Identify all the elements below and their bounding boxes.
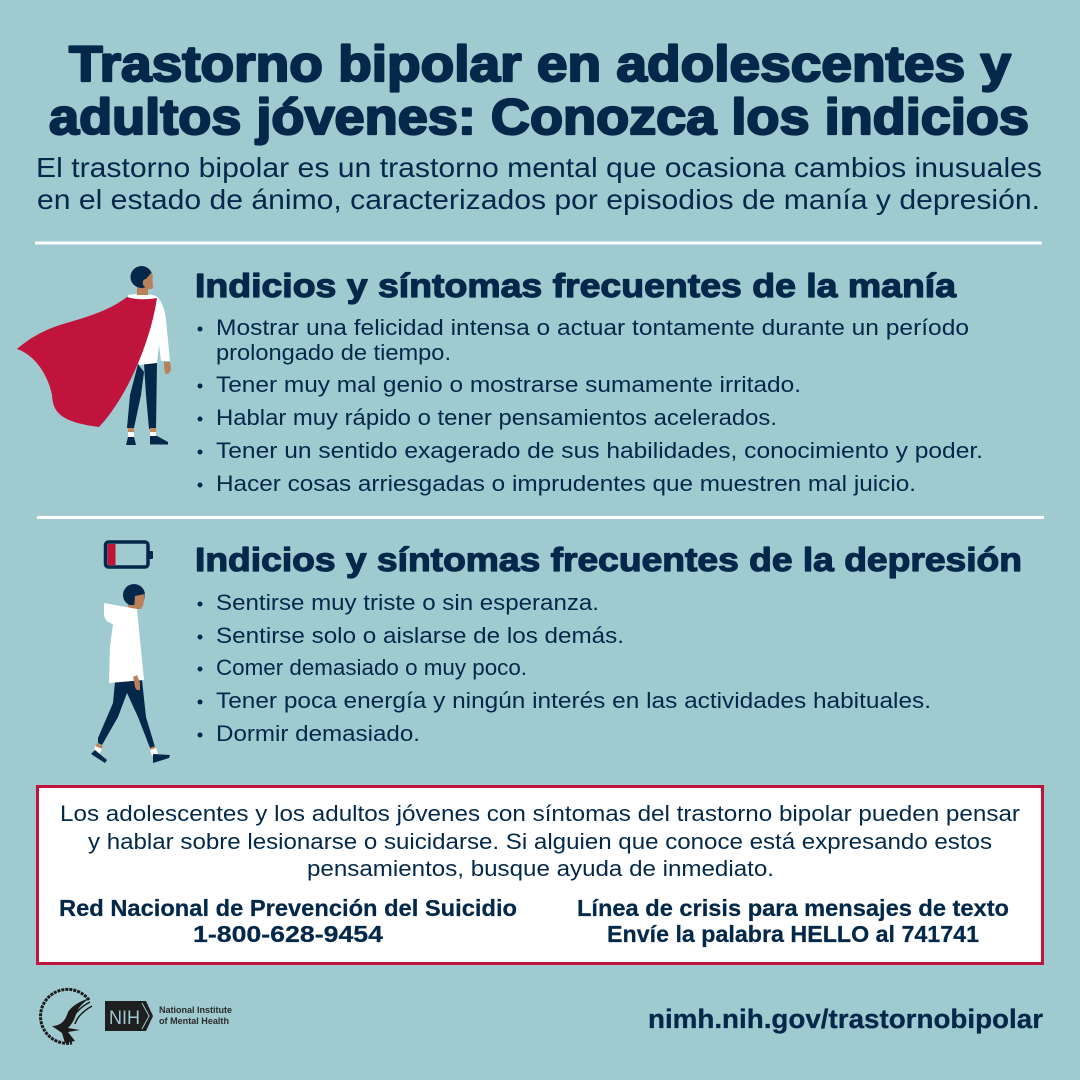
logo: NIH: National Institute [159,1005,232,1015]
list: mania symptoms: prolongado de tiempo. [216,340,451,365]
warning text: y hablar sobre lesionarse o suicidarse. Si alguien que conoce está expresando estos [88,829,992,854]
list: mania symptoms: Tener un sentido exagerado de sus habilidades, conocimiento y poder. [216,438,983,463]
list: depression symptoms: Sentirse muy triste o sin esperanza. [216,590,599,615]
list: mania symptoms: Tener muy mal genio o mostrarse sumamente irritado. [216,372,801,397]
list: mania symptoms [198,315,983,496]
list: mania symptoms: Hacer cosas arriesgadas o imprudentes que muestren mal juicio. [216,471,916,496]
title: Trastorno bipolar en adolescentes y [69,36,1011,92]
panel: depression [91,541,1022,763]
warning text: pensamientos, busque ayuda de inmediato. [307,856,774,881]
contact: suicide prevention line [59,895,517,947]
website URL: nimh.nih.gov/trastornobipolar [648,1004,1044,1034]
list: depression symptoms: Sentirse solo o aislarse de los demás. [216,623,624,648]
icon: walking person [91,584,170,763]
contact: crisis text line [577,895,1009,947]
logo: HHS eagle seal [41,989,92,1043]
list: depression symptoms: Dormir demasiado. [216,721,420,746]
intro text: en el estado de ánimo, caracterizados por episodios de manía y depresión. [37,184,1040,215]
contact: crisis text line: Línea de crisis para mensajes de texto [577,895,1009,921]
heading: mania: Indicios y síntomas frecuentes de la manía [195,267,957,304]
logo: NIH [105,1001,232,1031]
title [49,36,1029,145]
intro text [36,152,1042,215]
list: depression symptoms [198,590,931,746]
icon: low battery [106,542,153,567]
callout: crisis box [38,786,1042,964]
warning text: Los adolescentes y los adultos jóvenes con síntomas del trastorno bipolar pueden pensar [60,801,1020,826]
list: depression symptoms: Comer demasiado o muy poco. [216,655,527,680]
contact: crisis text line: Envíe la palabra HELLO al 741741 [607,921,979,947]
warning text [60,801,1020,881]
panel: mania [17,266,983,496]
list: mania symptoms: Mostrar una felicidad intensa o actuar tontamente durante un período [216,315,969,340]
contact: suicide prevention line: 1-800-628-9454 [193,921,383,947]
intro text: El trastorno bipolar es un trastorno mental que ocasiona cambios inusuales [36,152,1042,183]
heading: depression: Indicios y síntomas frecuentes de la depresión [195,541,1022,578]
icon: person with red cape [17,266,171,445]
list: mania symptoms: Hablar muy rápido o tener pensamientos acelerados. [216,405,777,430]
title: adultos jóvenes: Conozca los indicios [49,89,1029,145]
logo: NIH: NIH [109,1008,140,1029]
logo: NIH: of Mental Health [159,1016,229,1026]
contact: suicide prevention line: Red Nacional de Prevención del Suicidio [59,895,517,921]
list: depression symptoms: Tener poca energía y ningún interés en las actividades habituales. [216,688,931,713]
